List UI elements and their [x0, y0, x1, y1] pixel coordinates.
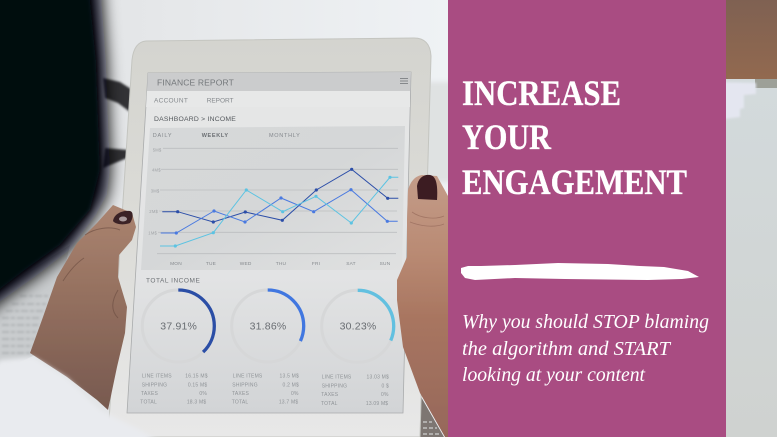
donut: 37.91%: 37.91%	[160, 320, 197, 332]
line chart panel: SAT	[346, 261, 356, 267]
title: INCREASE	[462, 73, 621, 113]
income table 3: LINE ITEMS	[322, 375, 352, 381]
income table 2: TOTAL	[232, 400, 248, 406]
account and report tabs: ACCOUNT	[154, 98, 188, 104]
icon: dark nail	[417, 175, 437, 200]
line chart panel: TUE	[206, 261, 216, 267]
donut: 31.86%: 31.86%	[250, 320, 286, 332]
subtitle	[462, 311, 709, 386]
line chart panel: 3M$	[151, 188, 160, 194]
income table 1: 18.3 M$	[187, 400, 206, 406]
income table 1: LINE ITEMS	[142, 374, 172, 380]
stacked papers	[716, 82, 756, 120]
line chart panel: MON	[170, 261, 182, 267]
mug handle	[103, 78, 131, 168]
purple text panel	[448, 0, 726, 437]
newspaper behind the hand	[0, 245, 70, 372]
icon: menu	[400, 78, 408, 84]
donut: 30.23%: 30.23%	[340, 321, 376, 333]
income table 1: TAXES	[141, 391, 158, 397]
total income heading: TOTAL INCOME	[146, 277, 200, 284]
income table 3: TAXES	[321, 392, 339, 398]
income table 2: 0.2 M$	[282, 382, 299, 388]
icon: dark nail	[113, 211, 133, 224]
line chart panel: DAILY	[153, 133, 172, 139]
income table 3: 0 $	[381, 383, 389, 389]
newspaper at bottom right	[419, 395, 444, 437]
donut: 31.86%	[232, 290, 304, 362]
tablet screen	[127, 72, 411, 413]
income table 1: 0%	[199, 391, 207, 397]
white brush stroke	[461, 263, 699, 280]
income table 1: 0.15 M$	[188, 382, 207, 388]
account and report tabs	[146, 91, 410, 107]
right photo strip	[716, 0, 777, 437]
income table 1: 16.15 M$	[185, 374, 208, 380]
line chart panel	[141, 126, 405, 270]
income table 3: 0%	[381, 392, 389, 398]
blurred dark hair	[0, 0, 110, 320]
line chart panel: 2M$	[149, 209, 159, 214]
income table 2: 13.7 M$	[279, 400, 298, 406]
subtitle: looking at your content	[462, 364, 645, 386]
subtitle: the algorithm and START	[462, 338, 672, 360]
tablet	[108, 38, 431, 437]
income table 3: TOTAL	[321, 401, 338, 407]
title: YOUR	[462, 117, 552, 157]
income table 3: SHIPPING	[322, 383, 347, 389]
title: ENGAGEMENT	[462, 162, 687, 202]
account and report tabs: REPORT	[207, 98, 234, 104]
line chart panel: WEEKLY	[202, 133, 228, 139]
subtitle: Why you should STOP blaming	[462, 311, 709, 333]
screen header bar: FINANCE REPORT	[157, 78, 234, 88]
chart line: light blue	[160, 176, 398, 248]
chart line: dark blue	[162, 168, 398, 224]
line chart panel: MONTHLY	[269, 133, 300, 139]
income table 2: TAXES	[232, 391, 249, 397]
income table 3: 13.03 M$	[367, 375, 389, 381]
chart line: mid blue	[161, 188, 398, 235]
photo background	[0, 0, 455, 437]
income table 2	[232, 374, 299, 406]
left hand	[30, 205, 136, 410]
right hand	[397, 175, 448, 437]
breadcrumb: DASHBOARD > INCOME	[154, 116, 236, 123]
line chart panel: WED	[240, 261, 252, 267]
tablet body	[108, 38, 431, 437]
income table 3	[321, 375, 389, 407]
income table 1: TOTAL	[140, 400, 157, 406]
white sleeve	[0, 357, 165, 437]
title	[462, 73, 687, 202]
income table 1	[140, 374, 208, 406]
line chart panel: 4M$	[152, 168, 161, 172]
donut: 37.91%	[142, 290, 214, 362]
income table 2: SHIPPING	[232, 382, 258, 388]
income table 2: 13.5 M$	[280, 374, 299, 380]
line chart panel: 5M$	[153, 148, 162, 152]
line chart panel: THU	[276, 261, 287, 267]
line chart panel: FRI	[312, 261, 320, 267]
income table 2: LINE ITEMS	[233, 374, 263, 380]
income table 2: 0%	[291, 391, 299, 397]
income table 3: 13.09 M$	[366, 401, 388, 407]
screen header bar	[147, 72, 411, 91]
donut: 30.23%	[322, 290, 394, 362]
line chart panel: SUN	[380, 261, 391, 267]
line chart panel: 1M$	[148, 230, 158, 235]
income table 1: SHIPPING	[142, 382, 167, 388]
